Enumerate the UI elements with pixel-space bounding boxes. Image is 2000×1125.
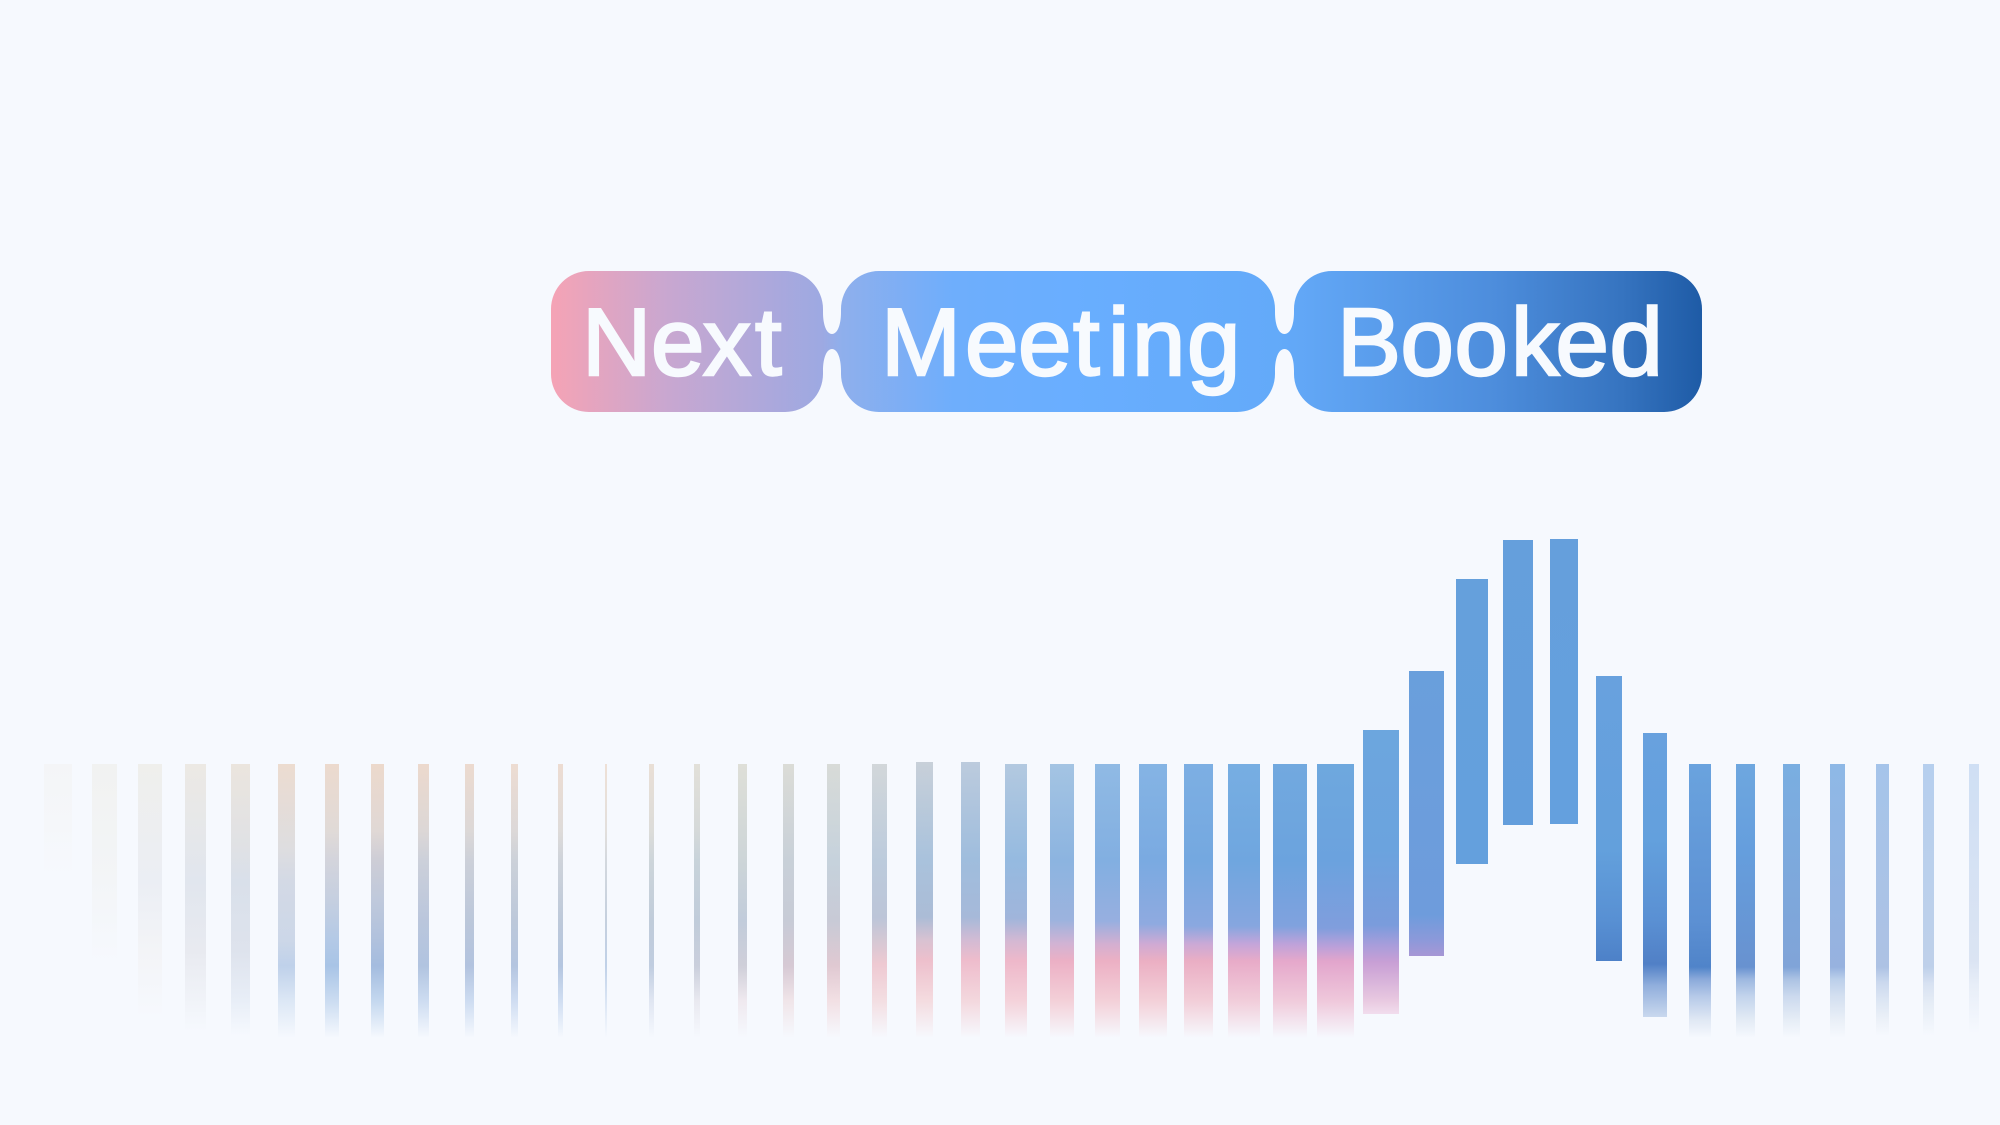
bar 27: [1228, 764, 1260, 1048]
bar 25: [1139, 764, 1167, 1048]
bar 9: [418, 764, 429, 1048]
bar 7: [325, 764, 339, 1048]
bar 34: [1550, 539, 1578, 824]
bar 36: [1643, 733, 1666, 1017]
bar 42: [1923, 764, 1934, 1048]
bar 24: [1095, 764, 1120, 1048]
bar 28: [1273, 764, 1307, 1048]
bar 18: [827, 764, 840, 1048]
bar 6: [278, 764, 295, 1048]
bar 35: [1596, 676, 1622, 961]
bar 2: [92, 764, 117, 1048]
bar 17: [783, 764, 794, 1048]
bar 12: [558, 764, 563, 1048]
bar 39: [1782, 764, 1800, 1048]
bar 23: [1050, 764, 1074, 1048]
bar 4: [185, 764, 206, 1048]
bar 8: [371, 764, 384, 1048]
bar 20: [916, 762, 933, 1048]
bar 13: [605, 764, 607, 1048]
bar 15: [694, 764, 700, 1048]
bar 29: [1317, 764, 1354, 1048]
bar 5: [231, 764, 250, 1048]
bar 38: [1736, 764, 1755, 1048]
bar 43: [1969, 764, 1978, 1048]
bar chart: waveform of vertical gradient bars: [92, 539, 1979, 1032]
bar 14: [649, 764, 654, 1048]
bar 11: [511, 764, 518, 1048]
connected pill shape: [551, 271, 1702, 412]
bar 21: [961, 762, 980, 1048]
word: Next: Next: [582, 289, 782, 396]
bar 40: [1830, 764, 1844, 1048]
word: Booked: Booked: [1337, 289, 1663, 396]
bar 31: [1409, 671, 1444, 956]
bar 22: [1005, 764, 1027, 1048]
bar 41: [1876, 764, 1889, 1048]
bar 32: [1456, 579, 1488, 864]
bar 10: [465, 764, 474, 1048]
bar 16: [738, 764, 747, 1048]
bar 26: [1184, 764, 1213, 1048]
bar 37: [1689, 764, 1711, 1048]
word: Meeting: Meeting: [881, 289, 1240, 396]
bar 1: [44, 764, 72, 1048]
bar 33: [1503, 540, 1533, 825]
bar 3: [138, 764, 162, 1048]
bar 19: [872, 764, 887, 1048]
bar 30: [1363, 730, 1399, 1014]
